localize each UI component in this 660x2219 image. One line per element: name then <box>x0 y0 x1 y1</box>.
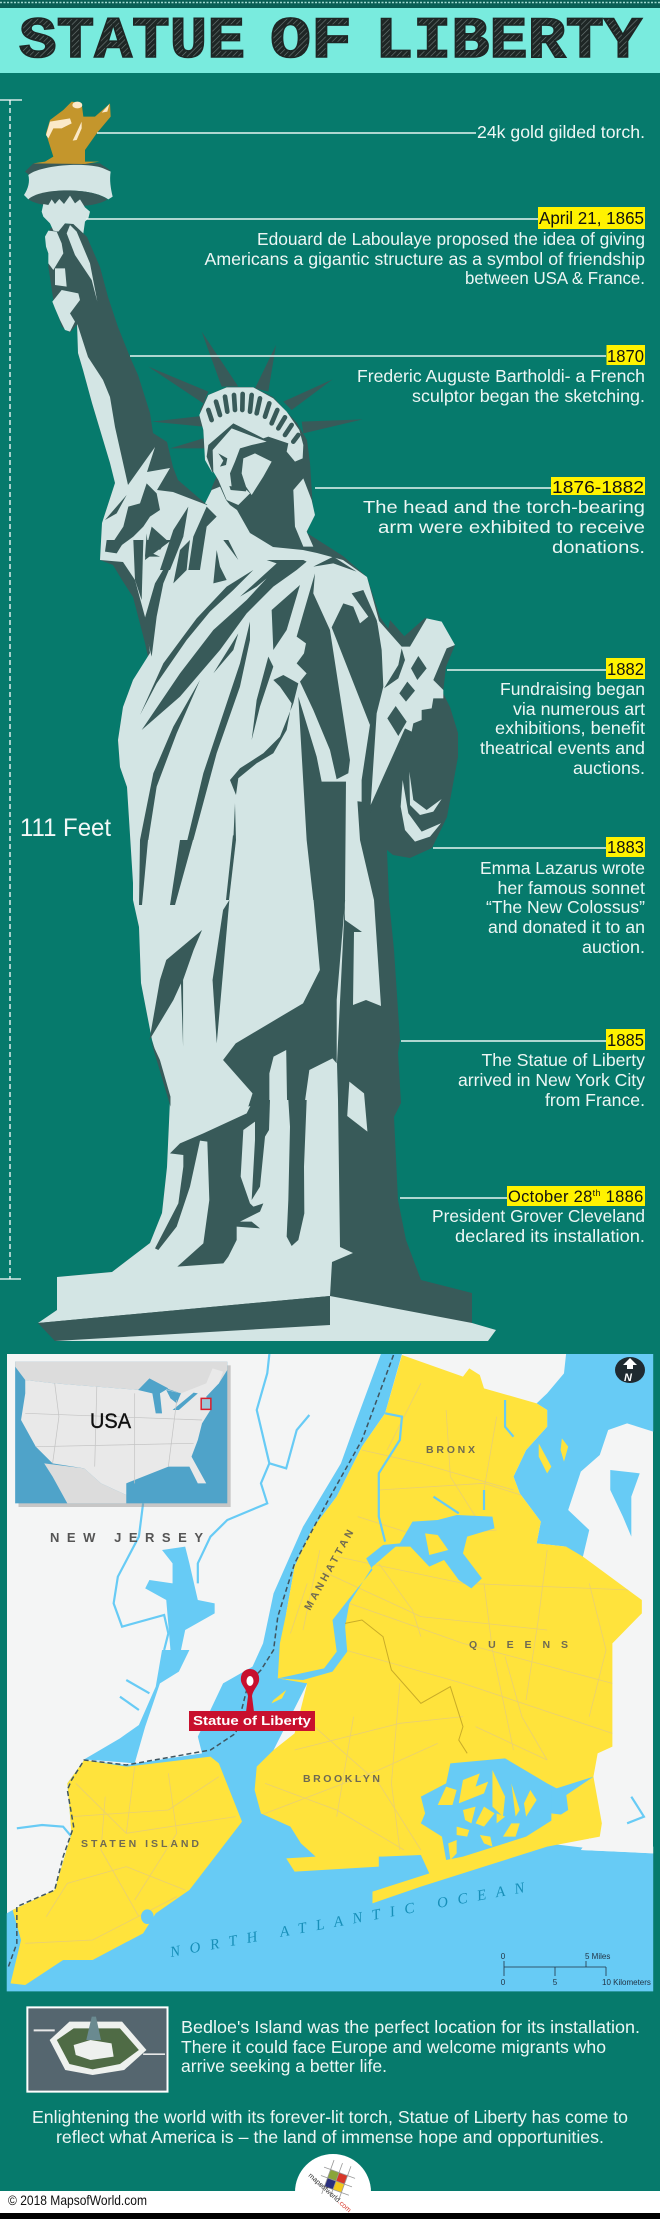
timeline: April 21, 1865: Edouard de Laboulaye proposed the idea of giving <box>257 229 645 249</box>
text: bedloe's island: arrive seeking a better life. <box>181 2056 387 2076</box>
usa inset map <box>15 1362 231 1507</box>
timeline: October 28th 1886: declared its installation. <box>455 1226 645 1246</box>
timeline: 1883: and donated it to an <box>488 917 645 937</box>
footer bar: © 2018 MapsofWorld.com <box>8 2192 147 2208</box>
map scale bar: 0 <box>501 1978 506 1987</box>
map labels: NEW JERSEY <box>50 1530 203 1545</box>
water: long island sound <box>513 1354 653 1580</box>
title <box>19 10 642 75</box>
timeline: 1882: via numerous art <box>513 699 645 719</box>
map labels: NORTH ATLANTIC OCEAN <box>168 1880 527 1961</box>
lower leg extensions <box>139 835 236 905</box>
statue silhouette <box>38 223 496 1341</box>
text: closing statement: Enlightening the world with its forever-lit torch, Statue of Liberty has come to <box>32 2107 628 2127</box>
header band <box>0 0 660 75</box>
timeline: 1883 <box>433 837 645 957</box>
title: LIBERTY <box>375 10 642 75</box>
timeline: October 28th 1886: President Grover Cleveland <box>432 1206 645 1226</box>
state boundary dashed <box>8 1355 394 1967</box>
water: east and harlem rivers <box>278 1515 495 1680</box>
timeline: 1882 <box>447 658 645 778</box>
road network <box>25 1383 631 1943</box>
map scale bar: 10 Kilometers <box>602 1978 651 1987</box>
water: jamaica bay <box>421 1758 568 1860</box>
borough boundary <box>345 1620 467 1753</box>
timeline: 1885 <box>401 1029 645 1110</box>
head: neck, hood and face <box>199 387 315 547</box>
map labels: QUEENS <box>469 1639 568 1651</box>
timeline: 1882: Fundraising began <box>500 679 645 699</box>
timeline: October 28th 1886: October 28 <box>508 1188 593 1206</box>
height dimension: 111 feet: 111 Feet <box>20 814 111 842</box>
light panel on right robe <box>345 780 381 1006</box>
flame <box>33 102 111 164</box>
timeline: 1885: The Statue of Liberty <box>482 1050 645 1070</box>
jamaica bay islands <box>438 1770 564 1860</box>
timeline: October 28th 1886 <box>400 1186 645 1246</box>
logo: mapsofworld <box>295 2154 371 2219</box>
timeline: 1876-1882: arm were exhibited to receive <box>378 517 645 537</box>
map scale bar <box>501 1952 651 1987</box>
pedestal base <box>38 1296 496 1341</box>
usa label: USA <box>90 1410 131 1433</box>
timeline: 1870: Frederic Auguste Bartholdi- a French <box>357 366 645 386</box>
map labels: BROOKLYN <box>303 1773 380 1785</box>
chest and torso folds <box>105 540 385 900</box>
lower robe shadows <box>149 900 367 1132</box>
sleeve folds <box>105 483 217 570</box>
statue illustration <box>24 102 496 1341</box>
timeline: April 21, 1865: between USA & France. <box>465 268 645 288</box>
text: closing statement <box>32 2107 628 2147</box>
map scale bar: 5 <box>553 1978 558 1987</box>
north arrow icon: N <box>624 1372 633 1384</box>
timeline: 1876-1882: donations. <box>552 537 645 557</box>
title: STATUE <box>19 10 245 75</box>
text: bedloe's island <box>181 2017 640 2076</box>
timeline: 1882: exhibitions, benefit <box>495 718 645 738</box>
text: bedloe's island: Bedloe's Island was the perfect location for its installation. <box>181 2017 640 2037</box>
timeline: 1882: theatrical events and <box>480 738 645 758</box>
new jersey rivers <box>17 1354 644 1873</box>
white land, far east <box>581 1838 653 1853</box>
tablet and hand <box>370 618 455 842</box>
timeline: 1883: Emma Lazarus wrote <box>480 858 645 878</box>
title: OF <box>270 10 352 75</box>
timeline: 1883: 1883 <box>607 837 644 857</box>
north arrow icon <box>615 1357 645 1384</box>
map labels <box>50 1444 568 1961</box>
photo: bedloe's island <box>27 2007 168 2092</box>
lower folds and legs <box>155 1100 307 1267</box>
map labels: STATEN ISLAND <box>81 1838 199 1850</box>
timeline: 1882: auctions. <box>573 758 645 778</box>
timeline: 1876-1882: 1876-1882 <box>552 477 644 497</box>
timeline: 1870 <box>130 345 645 406</box>
footer bar <box>0 2191 660 2213</box>
timeline: 1876-1882: The head and the torch-bearing <box>363 497 645 517</box>
land: manhattan, bronx, queens, brooklyn <box>255 1355 642 1903</box>
timeline: 1870: sculptor began the sketching. <box>412 386 645 406</box>
panel: New York City map <box>7 1354 653 1991</box>
timeline: 1885: 1885 <box>607 1030 644 1050</box>
robe light body <box>38 323 387 1323</box>
timeline: 1870: 1870 <box>607 346 644 366</box>
timeline: April 21, 1865: Americans a gigantic structure as a symbol of friendship <box>204 249 645 269</box>
timeline: 1883: her famous sonnet <box>498 878 645 898</box>
timeline: 1885: from France. <box>545 1090 645 1110</box>
timeline: torch note: 24k gold gilded torch. <box>477 122 645 142</box>
timeline: April 21, 1865: April 21, 1865 <box>539 208 644 228</box>
statue of liberty marker: Statue of Liberty <box>193 1713 312 1728</box>
torch and hand <box>24 102 113 332</box>
timeline: 1885: arrived in New York City <box>458 1070 645 1090</box>
logo: mapsofworld: mapsofworld.com <box>307 2172 352 2214</box>
timeline: 1883: “The New Colossus” <box>486 897 645 917</box>
text: bedloe's island: There it could face Europe and welcome migrants who <box>181 2037 606 2057</box>
crown spikes <box>148 332 363 448</box>
timeline: 1876-1882 <box>315 477 645 557</box>
map scale bar: 0 <box>501 1952 506 1961</box>
timeline: 1882: 1882 <box>607 659 644 679</box>
map scale bar: 5 Miles <box>585 1952 610 1961</box>
statue of liberty marker <box>189 1669 315 1731</box>
water: harbour and ocean <box>7 1354 653 1991</box>
water: newark bay <box>84 1650 189 1763</box>
map labels: BRONX <box>426 1444 475 1456</box>
map labels: MANHATTAN <box>302 1528 356 1612</box>
land: staten island <box>11 1757 242 1985</box>
timeline: October 28th 1886: th <box>593 1188 601 1198</box>
timeline: October 28th 1886: 1886 <box>601 1188 644 1206</box>
text: closing statement: reflect what America is – the land of immense hope and opportunities. <box>56 2127 604 2147</box>
map geography <box>7 1354 653 1991</box>
timeline: April 21, 1865 <box>86 207 645 288</box>
timeline: 1883: auction. <box>582 937 645 957</box>
